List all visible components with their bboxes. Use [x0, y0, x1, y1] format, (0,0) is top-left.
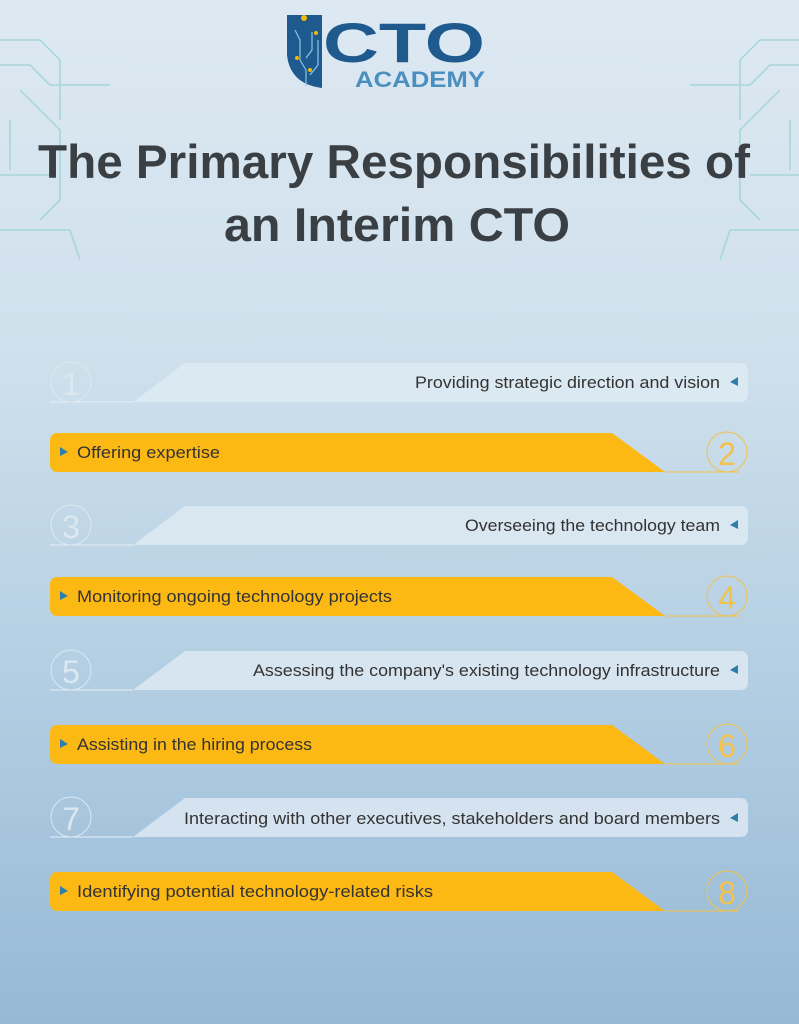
item 7: [50, 797, 748, 837]
item 1: Providing strategic direction and vision: [415, 373, 720, 392]
item 2: 2: [718, 436, 736, 472]
logo: ACADEMY: [355, 67, 485, 92]
title: an Interim CTO: [224, 198, 570, 251]
item 6: [50, 724, 747, 764]
item 8: Identifying potential technology-related risks: [77, 882, 433, 901]
title: [38, 135, 750, 251]
item 2: Offering expertise: [77, 443, 220, 462]
item 5: 5: [62, 654, 80, 690]
item 6: Assisting in the hiring process: [77, 735, 312, 754]
item 4: [50, 576, 747, 616]
item 3: Overseeing the technology team: [465, 516, 720, 535]
logo: CTO: [323, 11, 485, 74]
item 7: Interacting with other executives, stakeholders and board members: [184, 809, 720, 828]
item 4: Monitoring ongoing technology projects: [77, 587, 392, 606]
item 2: [50, 432, 747, 472]
item 4: 4: [718, 580, 736, 616]
item 8: [50, 871, 747, 911]
item 1: [50, 362, 748, 402]
item 3: [50, 505, 748, 545]
item 7: 7: [62, 801, 80, 837]
item 6: 6: [718, 728, 736, 764]
item 5: Assessing the company's existing technology infrastructure: [253, 661, 720, 680]
item 3: 3: [62, 509, 80, 545]
title: The Primary Responsibilities of: [38, 135, 750, 188]
item 5: [50, 650, 748, 690]
item 1: 1: [62, 366, 80, 402]
item 8: 8: [718, 875, 736, 911]
logo: [287, 11, 485, 92]
